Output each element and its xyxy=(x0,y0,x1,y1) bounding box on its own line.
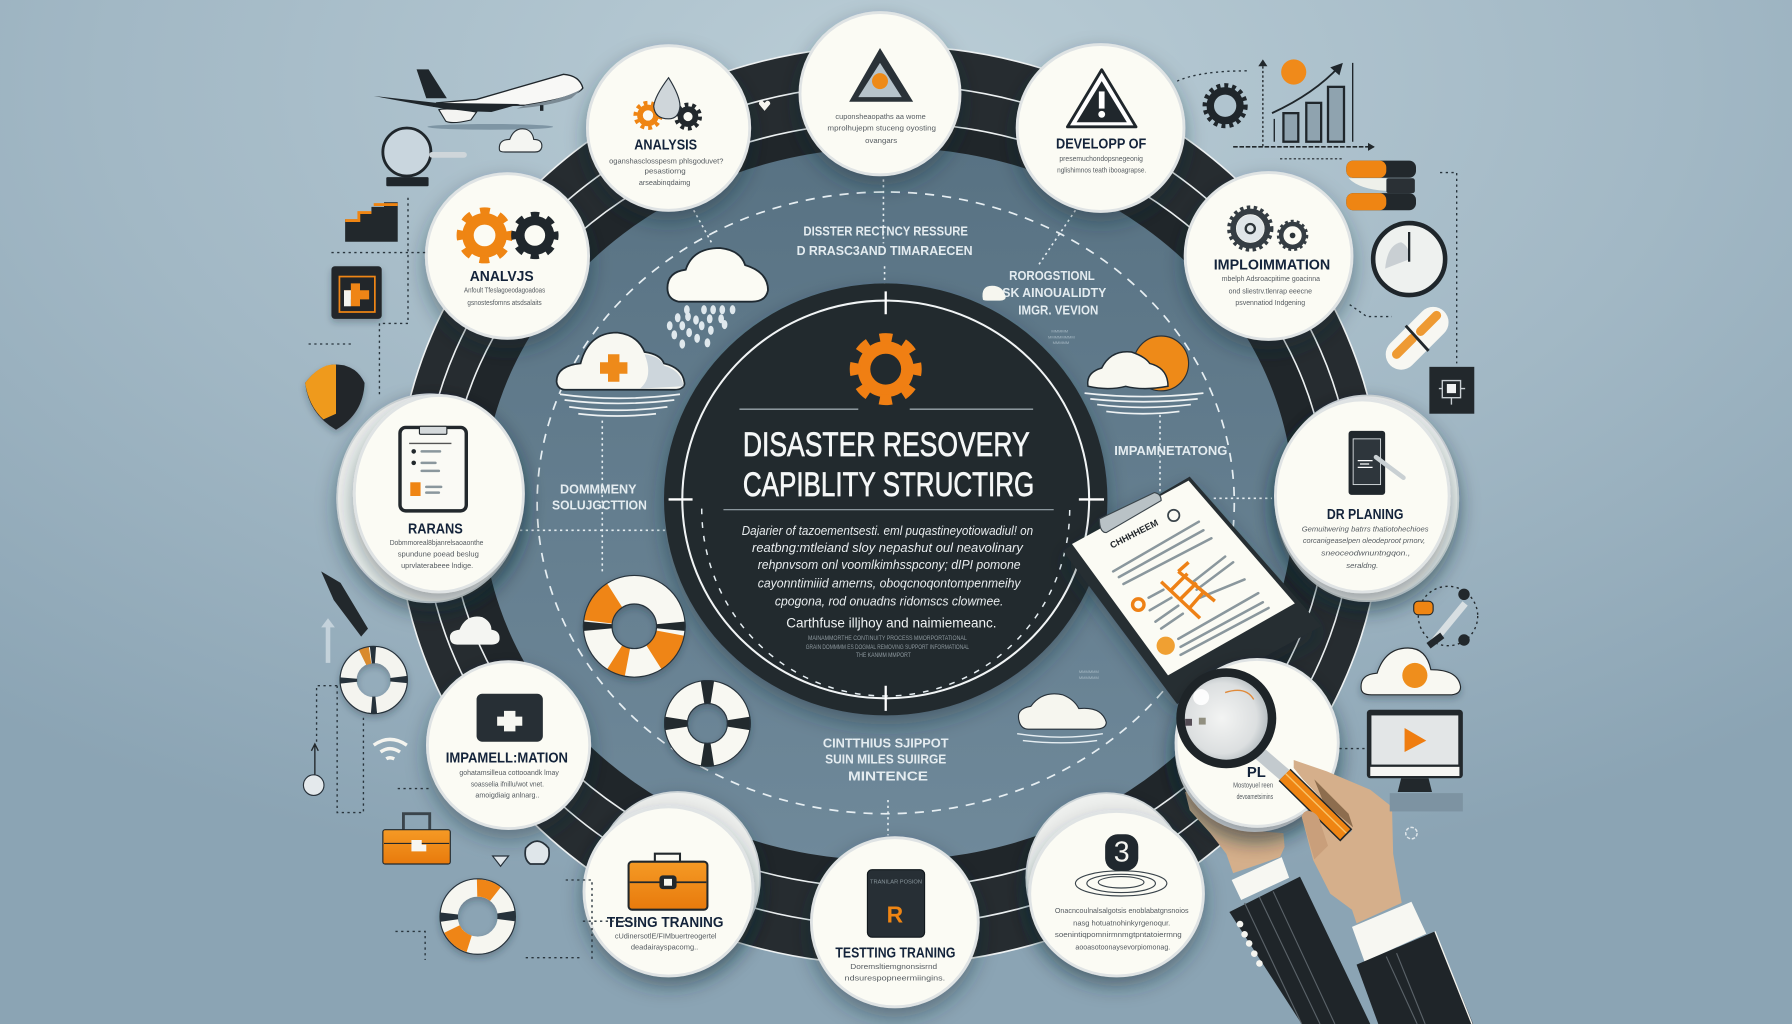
central fine print: GRAIN DOMMMM ES DOGMAL REMOVING SUPPORT INFORMATIONAL xyxy=(806,644,970,651)
icon: orange briefcase xyxy=(629,854,707,910)
inner label: top right: SK AINOUALIDTY xyxy=(1002,285,1107,300)
icon: top right gear xyxy=(1205,86,1245,126)
circle: numbered step three xyxy=(1026,793,1203,976)
icon: number three badge with ripples: 3 xyxy=(1114,837,1130,869)
dashed orbit xyxy=(537,192,1234,814)
circle: analysis top-left xyxy=(587,46,750,210)
node text: nasg hotuatnohinkyrgenoqur. xyxy=(1073,919,1170,928)
node text: soasselia ifnillu/wot vnet. xyxy=(471,779,544,788)
icon: cloud with orange cross xyxy=(557,333,685,416)
circle: testing training left xyxy=(584,792,760,976)
icon: dark R tile: TRANILAR POSION xyxy=(870,879,922,885)
icon: dark square with orange plus xyxy=(331,266,382,319)
inner label: top: D RRASC3AND TIMARAECEN xyxy=(797,243,973,258)
node text xyxy=(615,931,717,952)
icon: earbud tool xyxy=(1414,586,1478,646)
icon: lower left lifebuoy xyxy=(440,879,515,954)
icon: grey gears xyxy=(1229,207,1307,250)
main title: DISASTER RESOVERY xyxy=(743,426,1030,464)
icon: airplane xyxy=(374,69,583,130)
circle: DR planning xyxy=(1275,395,1458,601)
icon: small orange toolkit xyxy=(383,814,450,864)
node text xyxy=(464,286,545,307)
icon: right hand and handle xyxy=(1285,760,1402,923)
central description: Dajarier of tazoementsesti. eml puqastineyotiowadiul! on xyxy=(742,523,1033,538)
node text xyxy=(1222,274,1321,307)
node text: cUdinersotlE/FIMbuertreogertel xyxy=(615,931,717,940)
icon: checklist clipboard xyxy=(400,426,466,511)
node heading: DR PLANING xyxy=(1327,507,1403,523)
node heading: ANALYSIS xyxy=(634,138,697,154)
icon: sun behind cloud xyxy=(1085,336,1203,414)
node heading: PL xyxy=(1247,765,1266,781)
circle: analysis left xyxy=(426,174,589,338)
inner label: left xyxy=(552,482,647,513)
icon: video monitor xyxy=(1367,710,1463,792)
node text: sneoceodwnuntngqon., xyxy=(1321,548,1410,557)
node text xyxy=(390,538,483,570)
central fine print: THE KANMM MMPORT xyxy=(856,652,911,659)
icon: wifi signal xyxy=(374,739,407,759)
node text xyxy=(1233,780,1273,801)
node heading: DEVELOPP OF xyxy=(1056,137,1146,153)
icon: orange and black gears xyxy=(461,211,555,259)
icon: clipboard document xyxy=(1063,477,1321,704)
icon: suit sleeves xyxy=(1229,857,1473,1024)
node text xyxy=(845,962,945,983)
node text xyxy=(1055,906,1189,952)
central fine print: MAINAMMORTHE CONTINUITY PROCESS MMORPORTATIONAL xyxy=(808,635,967,642)
inner label: top xyxy=(797,223,973,258)
central fine print xyxy=(806,635,970,659)
node text: pesastiorng xyxy=(645,167,686,176)
node heading: TESTTING TRANING xyxy=(835,946,955,962)
icon: shield xyxy=(305,365,365,430)
monitor shadow strip xyxy=(1390,793,1463,811)
icon: cloud with orange dome xyxy=(1361,648,1461,695)
right dotted connectors xyxy=(1339,173,1457,749)
node text: Onacncoulnalsalgotsis enoblabatgnsnoios xyxy=(1055,906,1189,915)
inner label: bottom: CINTTHIUS SJIPPOT xyxy=(823,735,949,750)
node text: seraldng. xyxy=(1346,561,1378,570)
circle: develop xyxy=(1017,45,1184,211)
circle: rarans xyxy=(337,394,523,602)
icon: warning triangle xyxy=(1067,70,1136,127)
icon: rain cloud xyxy=(667,248,768,349)
inner label: left: SOLUJGCTTION xyxy=(552,498,647,513)
left dotted connectors xyxy=(309,198,640,960)
icon: triangle xyxy=(849,48,913,102)
outer ring road xyxy=(397,46,1382,965)
inner label: bottom: MINTENCE xyxy=(848,769,928,784)
node text: ond sliestrv.tlenrap eeecne xyxy=(1229,287,1312,296)
node text: corcanigeaselpen oleodeproot prnorv, xyxy=(1303,536,1425,545)
node text: gohatamsilleua cottooandk lmay xyxy=(459,768,559,777)
node text: nglishimnos teath ibooagrapse. xyxy=(1057,166,1146,175)
icon: left hand xyxy=(1185,790,1285,873)
tiny inner labels: MMMMM xyxy=(1053,340,1069,345)
tiny inner labels xyxy=(1048,329,1099,680)
node text: psvennatiod Indgening xyxy=(1235,298,1305,307)
node text: mbelph Adsroacpitime goacinna xyxy=(1222,274,1321,283)
node text: Anfoult Tfeslagoeodagoadoas xyxy=(464,286,545,295)
icon: small sky cloud xyxy=(499,129,542,152)
icon: clock xyxy=(1373,223,1445,295)
icon: stair bar chart xyxy=(345,202,398,242)
inner label: bottom: SUIN MILES SUIIRGE xyxy=(825,751,947,766)
icon: left magnifying glass xyxy=(383,128,464,186)
icon: small cloud behind label xyxy=(982,286,1006,301)
central disc xyxy=(664,283,1107,715)
node text: Mostoyuel reen xyxy=(1233,780,1273,789)
icon: small arrow up xyxy=(321,618,335,663)
node text xyxy=(459,768,559,800)
icon: dark R tile: R xyxy=(887,901,904,927)
tiny inner labels: MMMMMM xyxy=(1079,675,1099,680)
circle: triangle warning node xyxy=(800,13,960,175)
node text xyxy=(827,112,936,145)
central gear icon xyxy=(855,338,917,400)
chart: rising bars xyxy=(1233,59,1375,159)
central subheading: Carthfuse illjhoy and naimiemeanc. xyxy=(786,615,997,630)
node text: devoametsimins xyxy=(1237,792,1273,801)
circle: testing training bottom xyxy=(811,838,978,1007)
main title xyxy=(743,426,1034,504)
icon: dark square network xyxy=(1429,367,1474,414)
node text: amoigdiaig anlnarg.. xyxy=(475,791,539,800)
icon: dark R tile xyxy=(867,870,925,937)
icon: drop and gears xyxy=(635,78,700,129)
inner label: left: DOMMMENY xyxy=(560,482,637,497)
circle: planning under magnifier xyxy=(1175,659,1338,832)
icon: bottom cloud with waves xyxy=(1017,694,1106,743)
icon: left lifebuoy xyxy=(340,646,407,714)
central description: rehpnvsom onl voomlkimhsspcony; dIPI pomone xyxy=(758,557,1021,572)
node text: Gemuitwering batrrs thatiotohechioes xyxy=(1302,524,1429,533)
node heading: ANALVJS xyxy=(470,269,534,285)
dotted arc to chart xyxy=(1177,71,1247,81)
icon: clipboard document: CHHHHEEM xyxy=(1108,518,1160,550)
node text: mprolhujepm stuceng oyosting xyxy=(827,123,936,132)
node text: ovangars xyxy=(865,136,897,145)
central description: reatbng:mtleiand sloy nepashut oul neavolinary xyxy=(752,540,1024,555)
dotted connectors xyxy=(520,174,1272,835)
icon: orange lifebuoy xyxy=(583,575,685,677)
tiny inner labels: MMMMMM xyxy=(1079,669,1099,674)
icon: first aid box xyxy=(477,694,543,742)
node text: gsnostesfomns atsdsalaits xyxy=(467,298,542,307)
icon: orange cylinders xyxy=(1346,161,1416,210)
inner label: top: DISSTER RECTNCY RESSURE xyxy=(803,223,968,238)
node text: presemuchondopsnegeonig xyxy=(1059,154,1143,163)
node text: aooasotoonaysevorpiomonag. xyxy=(1075,943,1170,952)
inner label: bottom xyxy=(823,735,949,784)
node heading: IMPLOIMMATION xyxy=(1214,258,1330,274)
main title: CAPIBLITY STRUCTIRG xyxy=(743,466,1034,504)
icon: pill capsule xyxy=(1397,315,1437,354)
icon: small arrow marker xyxy=(493,856,509,866)
node text: spundune poead beslug xyxy=(398,550,479,559)
icon: small pale emblem xyxy=(1406,827,1417,839)
icon: heart marker xyxy=(759,101,770,111)
circle: implementation left xyxy=(427,662,590,829)
inner label: top right: IMGR. VEVION xyxy=(1018,302,1098,317)
inner label: right: IMPAMNETATONG xyxy=(1114,443,1227,458)
icon: magnifying glass xyxy=(1181,673,1285,775)
central description: cayonntimiiid amerns, oboqcnoqontompenmeihy xyxy=(758,575,1022,590)
central description xyxy=(742,523,1033,609)
tiny inner labels: MMMMM xyxy=(1051,329,1068,334)
icon: map pin xyxy=(303,744,324,795)
icon: pen xyxy=(321,571,368,637)
node text xyxy=(609,156,723,187)
icon: small shield outline xyxy=(525,841,549,864)
icon: white lifebuoy xyxy=(665,681,750,766)
icon: number three badge with ripples xyxy=(1075,834,1167,896)
icon: left small cloud xyxy=(450,617,500,645)
node text: uprvlaterabeee lndige. xyxy=(401,561,473,570)
circle: implementation right xyxy=(1185,173,1352,339)
node text: arseabinqdaimg xyxy=(639,178,690,187)
node heading: RARANS xyxy=(408,522,463,538)
node text: Doremsltiemgnonsisrnd xyxy=(850,962,937,971)
inner label: top right: ROROGSTIONL xyxy=(1009,268,1095,283)
node text: Dobmmoreal8bjanrelsaoaonthe xyxy=(390,538,483,547)
icon: tablet and pen xyxy=(1349,431,1403,495)
tiny inner labels: MMMMMMMM xyxy=(1048,334,1075,339)
node text xyxy=(1057,154,1146,175)
inner label: top right xyxy=(1002,268,1107,317)
node heading: IMPAMELL:MATION xyxy=(446,750,568,766)
node heading: TESING TRANING xyxy=(607,915,723,931)
node text: cuponsheaopaths aa wome xyxy=(835,112,926,121)
node text: oganshasclosspesm phlsgoduvet? xyxy=(609,156,723,165)
node text: soenintiqpomnirmnmgtpntatoiermng xyxy=(1055,930,1182,939)
central description: cpogona, rod onuadns ridomscs clowmee. xyxy=(775,594,1003,609)
node text: ndsurespopneermiingins. xyxy=(845,974,945,983)
node text xyxy=(1302,524,1429,570)
node text: deadairayspacomg.. xyxy=(631,943,698,952)
